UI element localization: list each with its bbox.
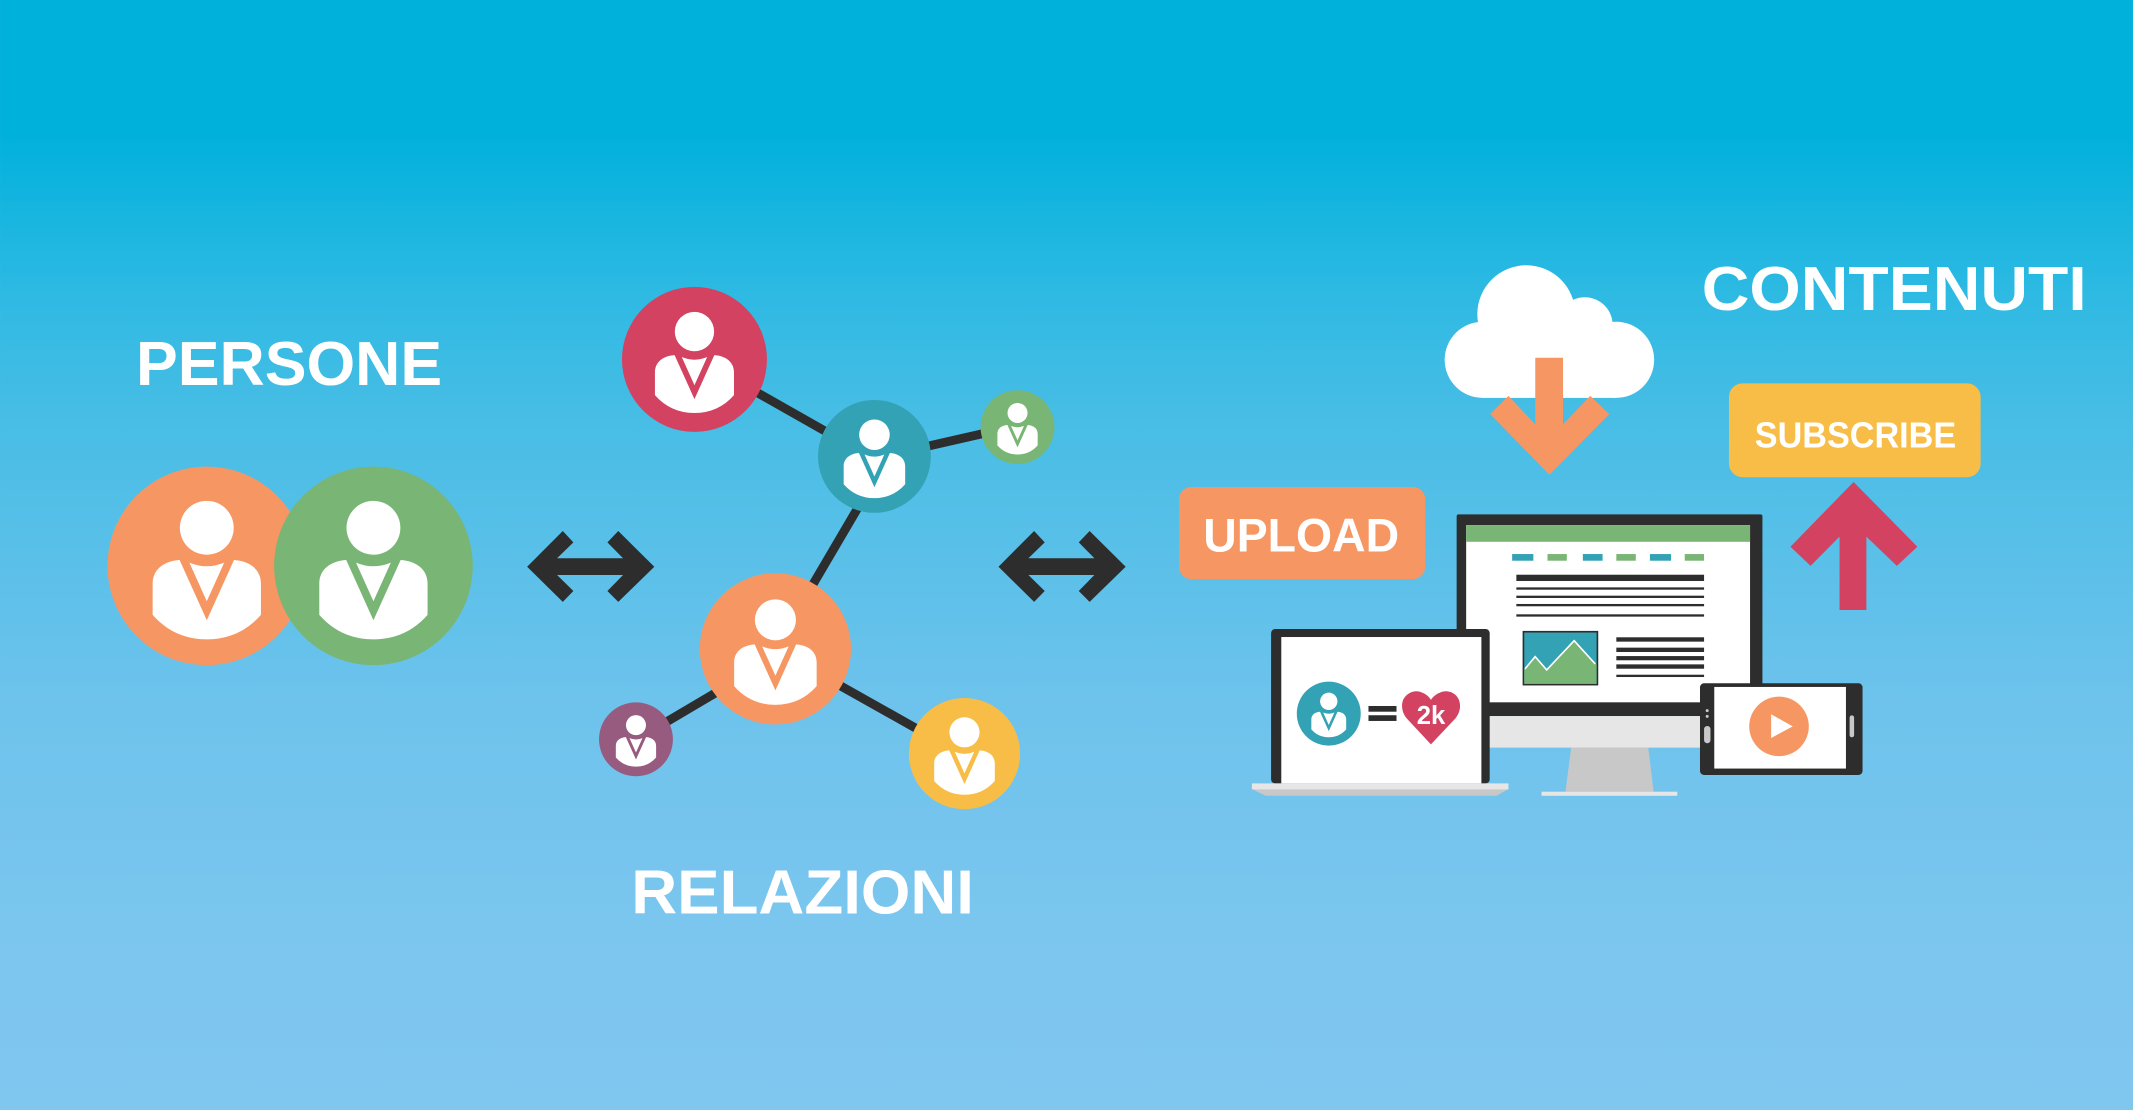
network connector lines: [661, 389, 988, 732]
panel: network of relations: [599, 287, 1054, 809]
icon: teal person: [818, 400, 931, 513]
icon: cloud: [1445, 265, 1654, 398]
button: upload: [1179, 487, 1425, 579]
icon: large orange person: [700, 573, 851, 725]
icon: play button: [1749, 697, 1809, 756]
button: subscribe: SUBSCRIBE: [1755, 415, 1956, 456]
heading: RELAZIONI: RELAZIONI: [631, 857, 974, 927]
arrow: download: [1490, 358, 1609, 475]
web page menu: [1512, 554, 1704, 561]
laptop frame: [1271, 629, 1490, 783]
device: tablet: [1700, 683, 1863, 775]
laptop screen: [1281, 637, 1481, 783]
arrow: upload: [1790, 482, 1917, 610]
icon: teal person: [1297, 682, 1361, 746]
icon: heart with 2k: [1402, 691, 1460, 744]
web page picture: [1523, 632, 1597, 685]
device: desktop monitor: [1457, 514, 1762, 796]
panel: two people: [107, 467, 473, 665]
icon: red person: [622, 287, 767, 432]
tablet buttons: [1704, 709, 1854, 743]
heading: PERSONE: PERSONE: [136, 329, 442, 399]
arrow: persone to relazioni: [527, 531, 654, 602]
monitor chin: [1457, 716, 1762, 748]
button: upload: UPLOAD: [1203, 510, 1399, 562]
icon: green person: [274, 467, 473, 665]
arrow: relazioni to contenuti: [998, 531, 1126, 602]
monitor screen: [1466, 525, 1750, 702]
laptop base: [1252, 783, 1508, 796]
monitor stand: [1542, 748, 1677, 796]
tablet screen: [1714, 687, 1846, 769]
icon: small purple person: [599, 702, 673, 776]
icon: orange person: [107, 467, 306, 665]
icon: heart with 2k: 2k: [1417, 702, 1446, 730]
icon: small green person: [981, 390, 1054, 464]
icon: yellow person: [909, 698, 1020, 809]
device: laptop: [1252, 629, 1508, 796]
equals sign: [1368, 706, 1397, 721]
heading: CONTENUTI: CONTENUTI: [1702, 254, 2087, 324]
web page side text: [1616, 637, 1704, 677]
button: subscribe: [1729, 383, 1981, 477]
web page text: [1516, 575, 1704, 617]
web page header: [1466, 525, 1750, 542]
monitor frame: [1457, 514, 1762, 716]
tablet frame: [1700, 683, 1863, 775]
